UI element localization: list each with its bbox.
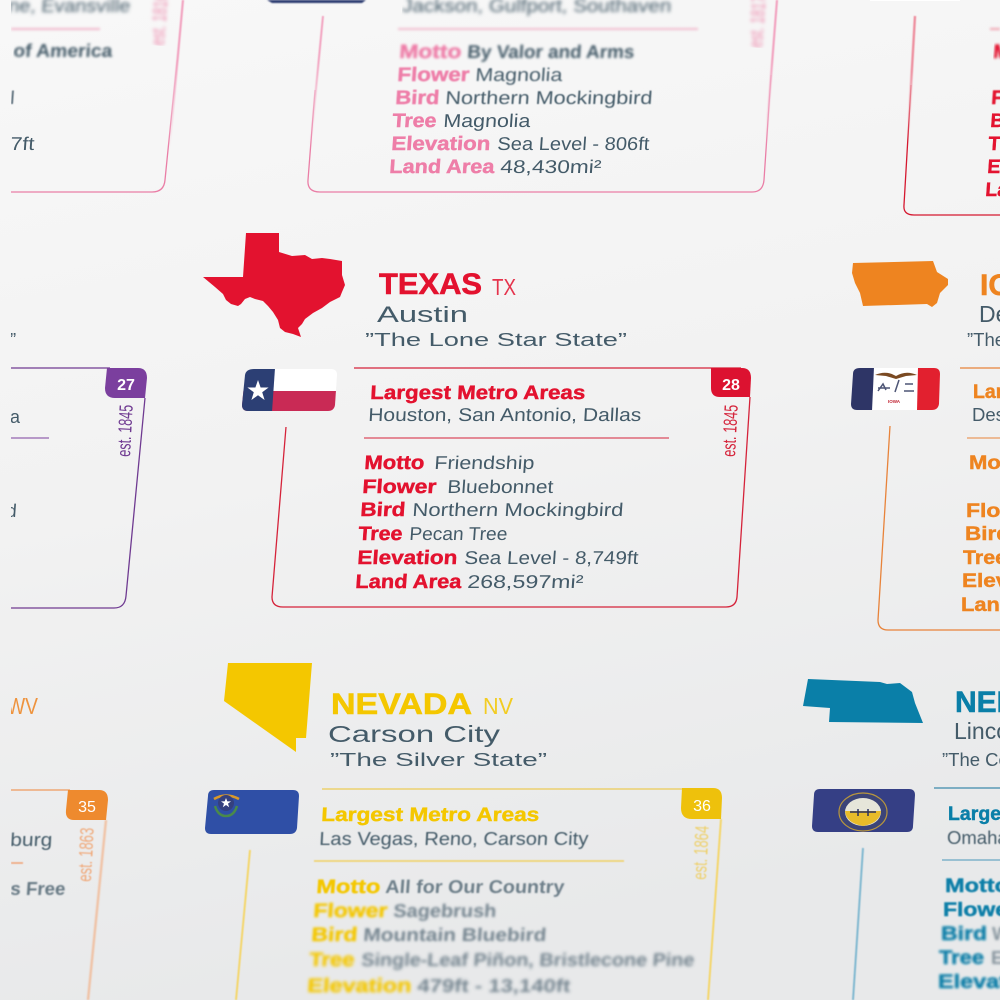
flag: Nebraska [812,789,915,832]
number tab: 35 [66,790,108,820]
facts: Nevada: Tree [309,949,355,971]
state shape: Iowa [852,261,948,307]
metro areas: Texas [368,382,642,425]
facts: Mississippi: Magnolia [443,110,532,131]
heading: Nevada: NEVADA [331,688,472,721]
facts: Texas: Flower [362,476,438,498]
heading: Nevada: ”The Silver State” [330,749,547,770]
panel: Nebraska [803,679,1000,1000]
panel: Florida card (cropped, purple): d [6,500,17,521]
facts: Nevada [307,876,695,997]
facts: Mississippi: Magnolia [475,64,564,85]
number tab: 28 [711,368,751,397]
panel: Indiana card (cropped): of America [13,40,114,61]
facts: Nevada: Sagebrush [393,900,497,921]
facts: Nevada: Single-Leaf Piñon, Bristlecone Pine [361,949,695,970]
metro areas: Texas: Houston, San Antonio, Dallas [368,404,642,425]
facts: Texas: 268,597mi² [467,571,584,592]
panel: Florida card (cropped, purple): a [10,406,21,427]
heading: Nevada: NV [483,693,514,719]
heading: Texas: ”The Lone Star State” [365,329,627,350]
number tab: 27: 27 [117,377,135,394]
panel: Arkansas card (cropped) [870,0,1000,215]
facts: Texas: Northern Mockingbird [412,499,624,520]
heading: Texas: Austin [377,302,468,327]
card outline: Nevada [322,788,690,790]
facts: Texas: Bluebonnet [447,476,555,497]
facts: Texas: Elevation [357,547,458,569]
facts: Mississippi: Northern Mockingbird [445,87,653,108]
facts: Texas [355,452,640,593]
facts: Nevada: Motto [316,876,381,898]
facts: Mississippi: Bird [395,87,440,109]
facts: Texas: Bird [360,499,406,521]
flag: Texas [240,368,340,412]
heading: Texas: TX [492,274,516,300]
facts: Mississippi: Tree [392,110,437,132]
flag: Nevada [205,790,299,834]
flag: Mississippi (cropped) [267,0,366,3]
facts: Texas: Land Area [355,571,462,593]
facts: Mississippi: 48,430mi² [500,156,602,177]
card outline: Texas [272,368,750,607]
state shape: Nebraska [803,679,923,723]
facts: Nebraska: Tree [939,947,984,969]
state shape: Texas [203,233,345,337]
facts: Texas: Sea Level - 8,749ft [464,547,640,568]
metro areas: Nevada [319,804,590,849]
panel: West Virginia card (cropped): s Free [10,878,66,899]
panel: Florida card (cropped, purple) [6,329,147,608]
number tab: 35: 35 [78,799,96,816]
heading: Texas: TEXAS [379,268,482,301]
flag: Iowa: IOWA [888,399,901,404]
number tab: 27 [105,368,147,398]
panel: Indiana card (cropped): l [10,87,15,108]
panel: Nevada [205,663,722,1000]
heading: Nebraska [942,686,1000,770]
heading: Nevada: Carson City [328,721,501,747]
heading: Iowa [967,269,1000,350]
panel: Mississippi card [267,0,777,192]
facts: Nevada: Flower [313,900,389,922]
heading: Nevada [328,688,547,770]
card outline: Iowa [878,368,1000,630]
facts: Mississippi: Land Area [389,156,495,178]
panel: Indiana card (cropped): 7ft [10,133,36,154]
facts: Texas: Friendship [434,452,535,473]
panel: Iowa [850,261,1000,630]
facts: Mississippi: Sea Level - 806ft [497,133,651,154]
facts: Texas: Pecan Tree [409,523,508,544]
facts: Nebraska: Bird [941,923,987,945]
metro areas: Nevada: Las Vegas, Reno, Carson City [319,828,590,849]
facts: Nevada: Elevation [307,975,412,997]
metro areas: Texas: Largest Metro Areas [370,382,586,404]
number tab: 36: 36 [693,798,711,815]
panel: Indiana card (cropped) [8,0,183,192]
panel: West Virginia card (cropped): est. 1863 [75,827,99,882]
state shape: Nevada [224,663,312,752]
facts: Texas: Motto [364,452,425,474]
metro areas: Nevada: Largest Metro Areas [321,804,540,826]
facts: Nevada: All for Our Country [385,876,566,897]
card outline: Nebraska [934,787,1000,789]
facts: Mississippi: Flower [397,64,471,86]
facts: Iowa [961,381,1000,616]
facts: Mississippi [389,41,653,178]
facts: Mississippi: By Valor and Arms [467,41,635,62]
panel: Texas [203,233,751,607]
facts: Nevada: 479ft - 13,140ft [417,975,571,996]
facts: Nevada: Bird [311,924,358,946]
panel: West Virginia card (cropped) [7,693,108,1000]
panel: West Virginia card (cropped): WV [7,693,39,719]
panel: West Virginia card (cropped): burg [10,829,53,850]
panel: Florida card (cropped, purple): est. 1845 [114,404,138,457]
panel: Texas: est. 1845 [719,404,743,457]
flag: Iowa [850,367,942,411]
facts: Mississippi: Motto [399,41,462,63]
heading: Texas [365,268,627,350]
panel: Nevada: est. 1864 [690,825,714,880]
number tab: 36 [681,788,722,819]
panel: Florida card (cropped, purple): ” [10,329,16,350]
facts: Texas: Tree [358,523,403,545]
facts: Mississippi: Elevation [391,133,491,155]
facts: Nevada: Mountain Bluebird [363,924,547,945]
facts: Nebraska [938,803,1000,993]
facts: Nebraska: Motto [945,875,1000,897]
number tab: 28: 28 [722,377,740,394]
